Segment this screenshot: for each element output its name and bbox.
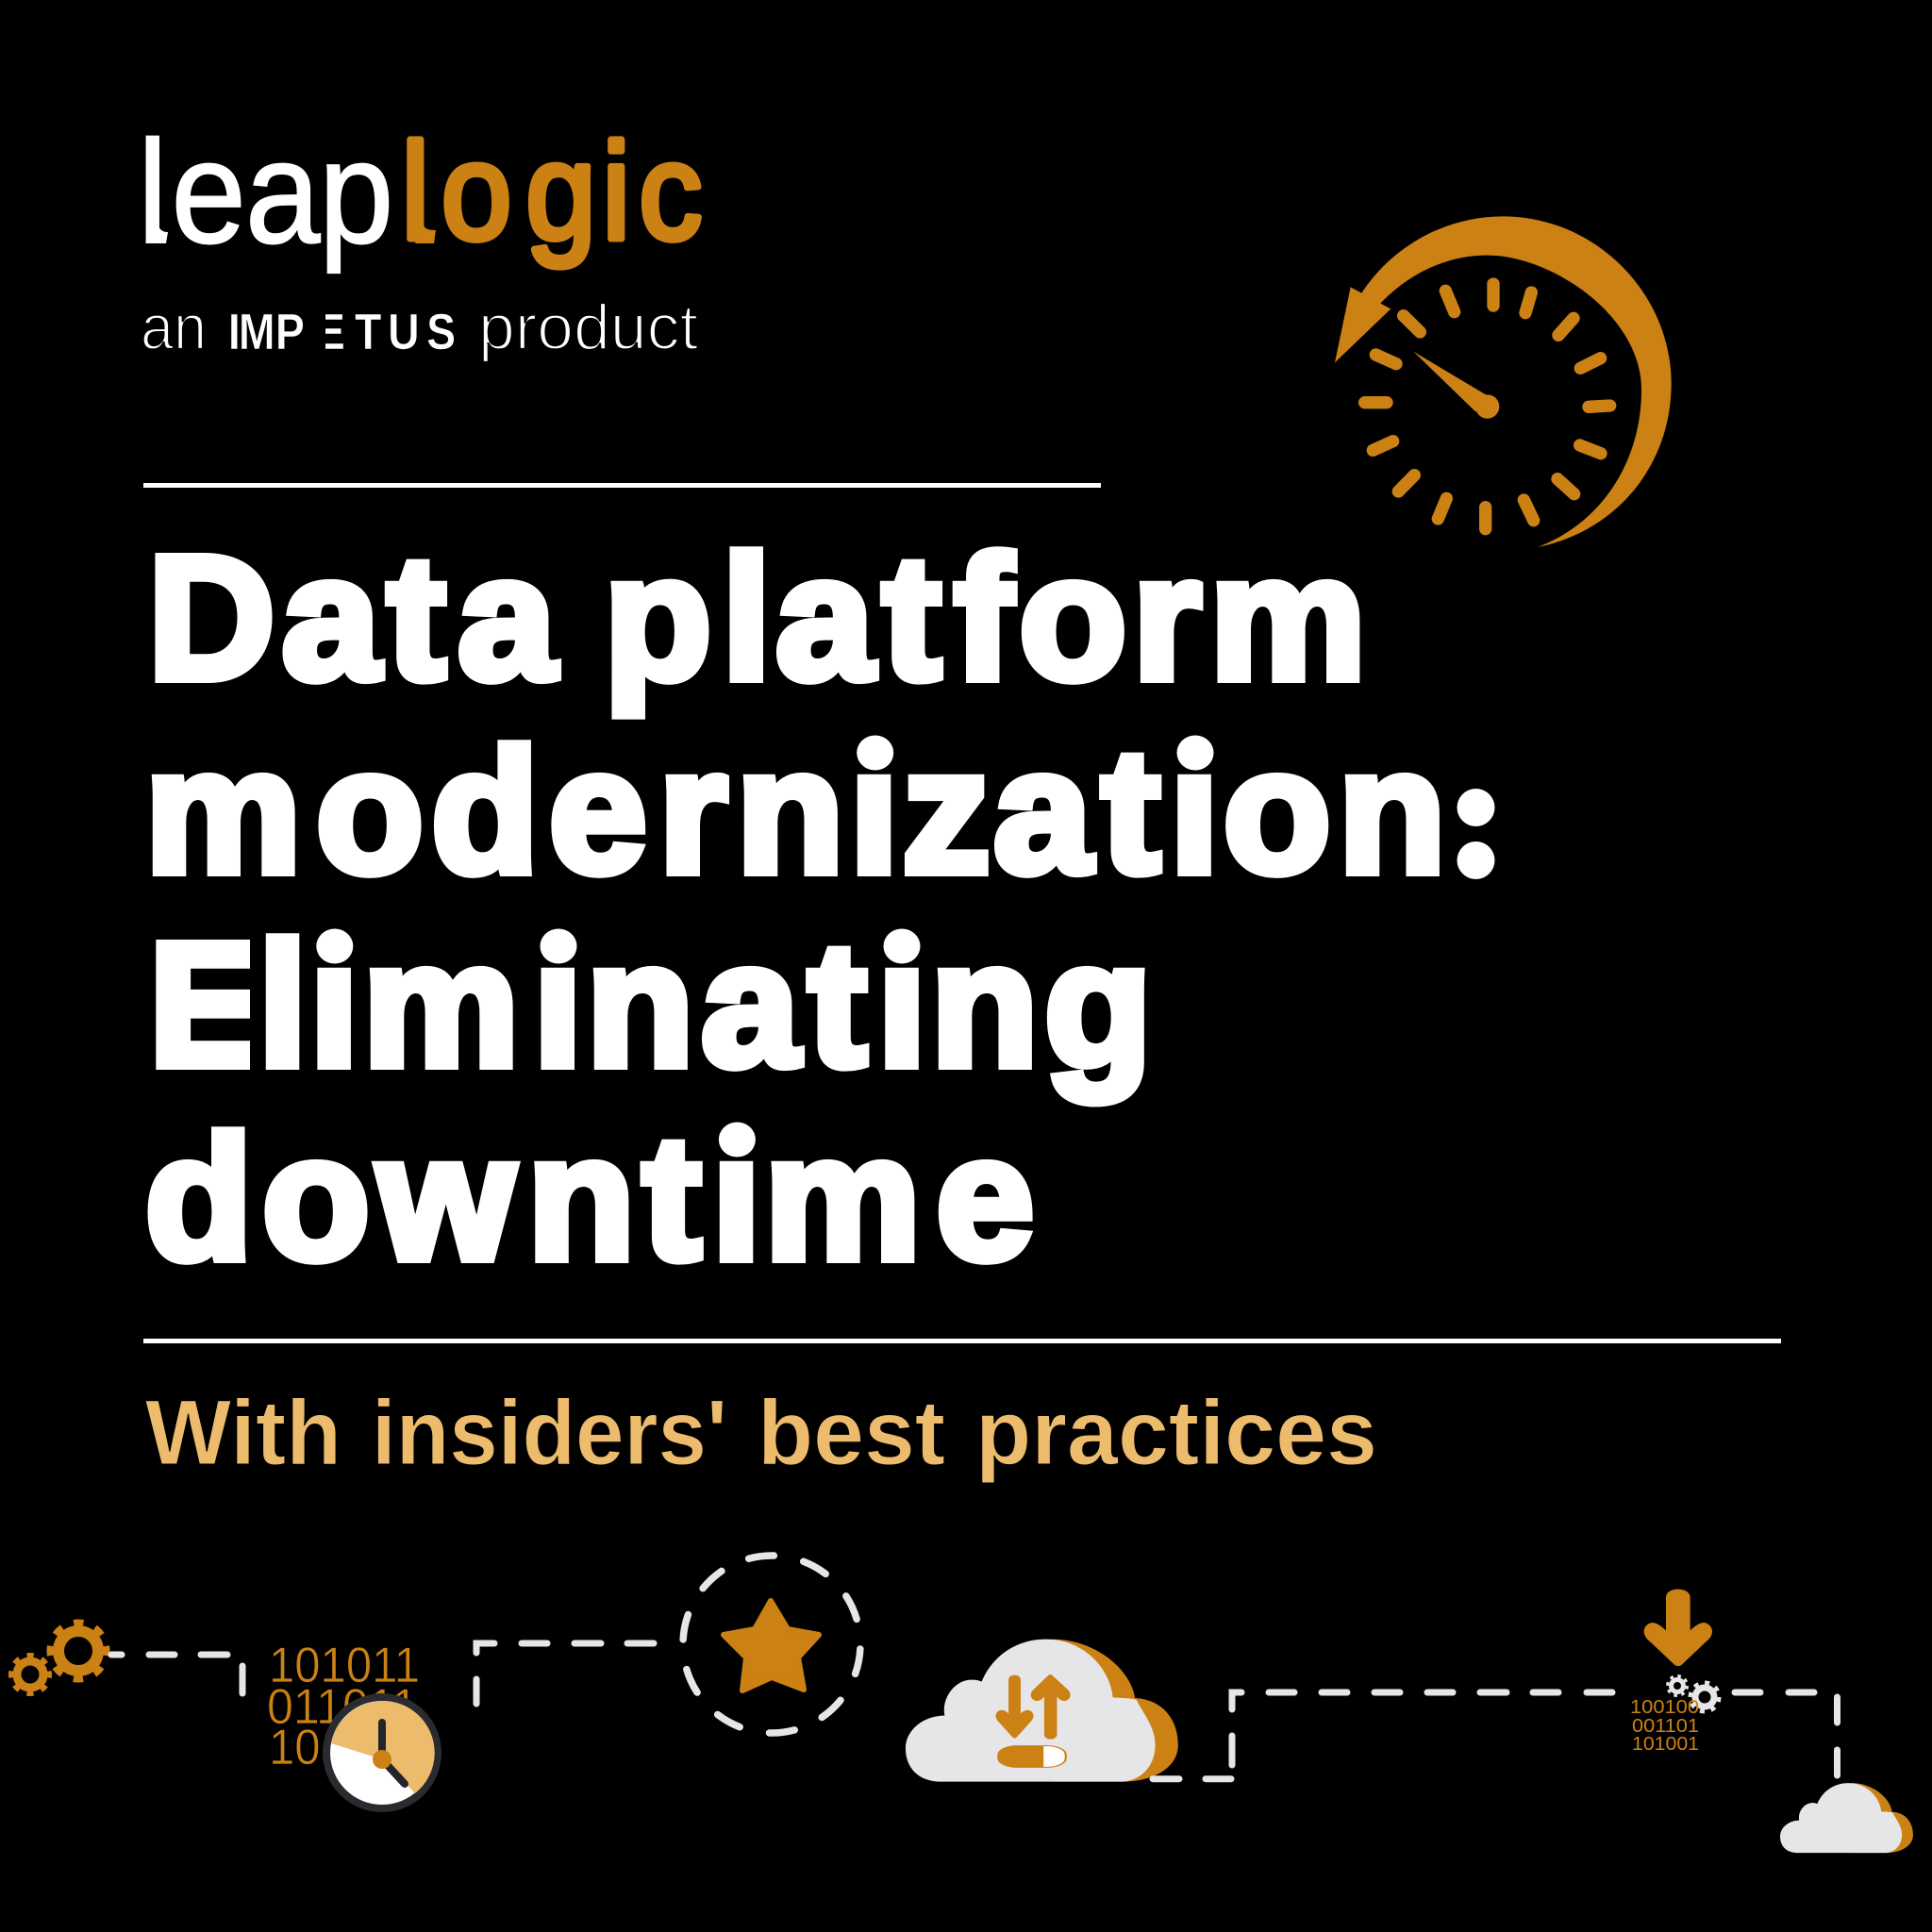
subtitle: insiders' xyxy=(372,1381,727,1484)
divider: bottom rule xyxy=(143,1339,1781,1343)
title: Data platform xyxy=(148,521,1366,716)
icon: star in dashed circle xyxy=(663,1536,880,1753)
icon: download arrow xyxy=(1644,1590,1712,1666)
divider: top rule xyxy=(143,483,1101,488)
logo: leaplogic: logic xyxy=(402,115,702,268)
logo: leaplogic: leap xyxy=(138,109,393,274)
icon: large cloud with transfer arrows xyxy=(906,1640,1178,1782)
binary text block small: 101001 xyxy=(1632,1734,1699,1755)
icon: clock xyxy=(323,1693,441,1812)
tagline: an IMPETUS product: IMPETUS xyxy=(228,303,456,360)
dashed connector: binary to star xyxy=(476,1643,654,1704)
subtitle: practices xyxy=(975,1381,1377,1484)
dashed connector: gears to binary xyxy=(111,1655,242,1693)
subtitle xyxy=(145,1381,1377,1484)
tagline: an IMPETUS product xyxy=(141,291,698,363)
title xyxy=(145,521,1507,1296)
tagline: an IMPETUS product: product xyxy=(478,291,698,363)
binary text block small: 100100 xyxy=(1630,1697,1699,1718)
title: Eliminating xyxy=(149,908,1152,1103)
tagline: an IMPETUS product: an xyxy=(141,291,207,363)
icon: white gears xyxy=(1668,1676,1719,1711)
binary text block with clock xyxy=(267,1638,441,1812)
icon: orange gears xyxy=(8,1619,110,1696)
dashed connector: large cloud to small cloud xyxy=(1153,1692,1838,1779)
title: downtime xyxy=(145,1101,1034,1296)
icon: small cloud xyxy=(1780,1783,1913,1853)
binary text block with clock: 011011 xyxy=(267,1679,418,1735)
title: modernization: xyxy=(145,714,1507,909)
binary text block small xyxy=(1630,1697,1699,1755)
binary text block with clock: 101101 xyxy=(269,1720,420,1775)
icon: speedometer with circular arrow xyxy=(1335,216,1672,547)
logo: leaplogic xyxy=(138,109,702,274)
subtitle: best xyxy=(758,1381,945,1484)
binary text block small: 001101 xyxy=(1632,1716,1699,1737)
binary text block with clock: 101011 xyxy=(269,1638,420,1693)
subtitle: With xyxy=(145,1381,341,1484)
